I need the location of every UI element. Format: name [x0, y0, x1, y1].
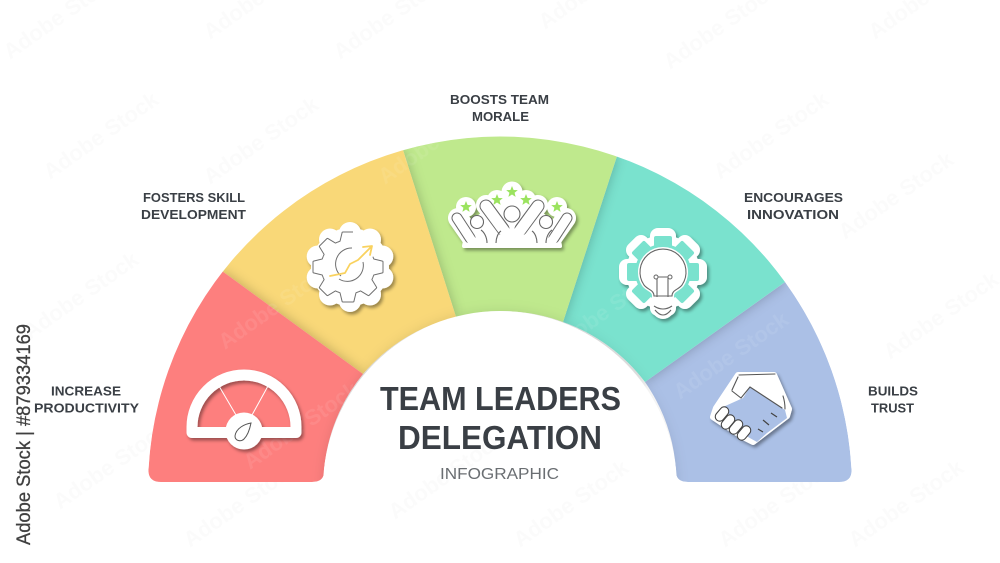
text: Adobe Stock [374, 91, 499, 189]
inner white semicircle shadow [323, 311, 677, 500]
arch of five segments [148, 136, 852, 500]
label: fosters skill development: FOSTERS SKILL [143, 190, 245, 205]
title: TEAM LEADERS [380, 380, 621, 417]
panel: fosters skill development segment [222, 150, 456, 374]
panel: boosts team morale segment [403, 136, 617, 322]
panel: encourages innovation segment [563, 156, 785, 382]
subtitle: INFOGRAPHIC [440, 466, 559, 483]
label: boosts team morale: MORALE [472, 109, 529, 124]
label: increase productivity: PRODUCTIVITY [34, 400, 139, 416]
label: builds trust: TRUST [871, 400, 914, 416]
text: Adobe Stock [669, 306, 794, 404]
icon: handshake [713, 374, 789, 442]
title: DELEGATION [398, 419, 602, 456]
icon: speedometer gauge [192, 375, 296, 450]
icon: light bulb in gear [619, 228, 707, 319]
label: fosters skill development: DEVELOPMENT [141, 207, 246, 222]
icon: gear with growth arrow [307, 222, 393, 312]
icon: cheering team with stars [456, 182, 567, 246]
label: increase productivity: INCREASE [51, 384, 121, 398]
panel: increase productivity segment [148, 271, 363, 482]
text: Adobe Stock [544, 261, 669, 359]
label: encourages innovation: INNOVATION [747, 207, 839, 222]
label: encourages innovation: ENCOURAGES [744, 190, 843, 205]
label: boosts team morale: BOOSTS TEAM [450, 92, 549, 107]
text: Adobe Stock [239, 376, 364, 474]
label: builds trust: BUILDS [868, 384, 918, 398]
text: Adobe Stock [214, 256, 339, 354]
panel: builds trust segment [645, 282, 852, 482]
stock id side text: Adobe Stock | #879334169 [14, 324, 35, 545]
